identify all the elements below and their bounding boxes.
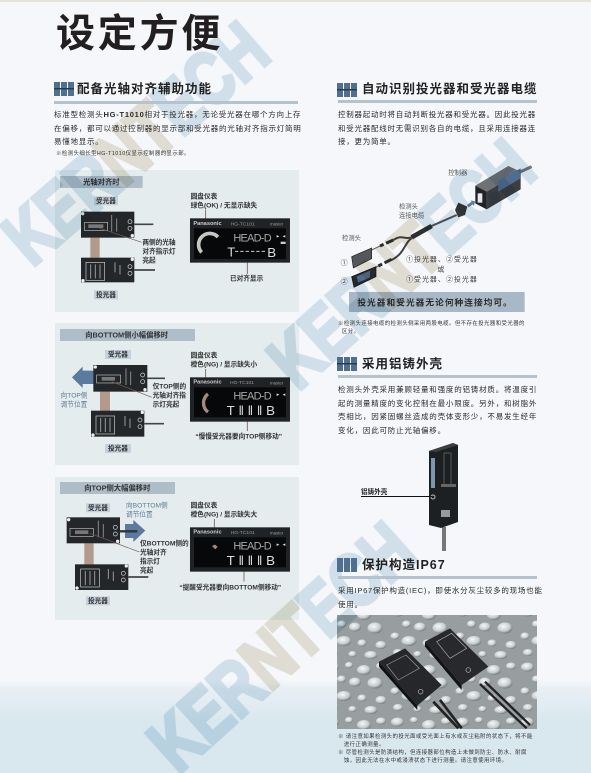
heading: auto identify cables: 自动识别投光器和受光器电缆: [362, 82, 538, 96]
label: emitter: [94, 290, 118, 299]
arrow: adjust to top: [72, 367, 94, 388]
label: sensor head: 检测头: [342, 233, 361, 242]
controller display: Panasonic: [193, 221, 222, 227]
notes: IP67: 蚀，因此无法在水中或浸渍状态下进行测量。请注意使用环境。: [344, 758, 507, 764]
controller unit: [475, 166, 532, 209]
text: auto identify body: [338, 110, 536, 146]
controller display: HEAD-D: [233, 232, 272, 244]
controller display: T: [227, 245, 235, 259]
panel: large offset background: [55, 477, 299, 620]
panel 2 diagram: small offset to bottom: [60, 329, 290, 453]
optical beam: [90, 238, 100, 258]
optical beam: [84, 543, 94, 564]
note: cable: [338, 320, 525, 335]
leader line: [206, 209, 247, 274]
label: receiver: 受光器: [108, 350, 128, 359]
callout: move hint: “提醒受光器要向BOTTOM侧移动”: [179, 582, 281, 591]
controller display: [190, 527, 290, 572]
label: adjust direction: 调节位置: [126, 509, 153, 518]
photo: waterproof sensors: [337, 615, 537, 729]
callout bar: [349, 292, 525, 312]
sensor head 2: [352, 267, 376, 287]
text: aluminum housing body: 变化，因此可防止光轴偏移。: [338, 426, 446, 434]
label: receiver: [86, 503, 110, 512]
callout: both indicators lit: 两侧的光轴: [142, 237, 176, 246]
note: cable: ※检测头连接电缆的检测头侧采用两股电缆。但不存在投光器和受光器的: [338, 321, 525, 327]
leader line: [90, 533, 139, 552]
text: IP67 body: [338, 586, 543, 608]
label: adjust direction: 向TOP侧: [61, 390, 88, 399]
panel title: [60, 482, 175, 494]
note: cable: 区分。: [342, 329, 359, 335]
panel title: [60, 329, 195, 341]
label: sensor cable: [399, 202, 425, 220]
arrow: plug to controller: [467, 200, 475, 207]
label: emitter: 投光器: [96, 290, 116, 299]
sensor: emitter: [81, 258, 155, 282]
controller display: Panasonic: [193, 380, 222, 386]
connection options: ①投光器、②受光器: [406, 255, 478, 264]
panel 3 diagram: large offset to top: [60, 482, 290, 605]
controller display: HEAD-D: [233, 540, 272, 552]
label: aluminum housing: 铝铸外壳: [361, 487, 388, 496]
callout: top indicator lit: 示灯亮起: [153, 400, 180, 409]
callout: circle meter: 圆盘仪表: [191, 191, 218, 200]
controller display: [190, 218, 290, 263]
panel title: 光轴对齐时: [83, 178, 120, 187]
connector cable: [370, 203, 467, 271]
top strip: [0, 0, 591, 2]
label: receiver: 受光器: [96, 196, 116, 205]
label: receiver: 受光器: [88, 503, 108, 512]
controller display: T‖‖‖B: [227, 553, 275, 568]
label: adjust direction: [61, 390, 88, 408]
leader line: [112, 382, 152, 397]
sensor head 1: [352, 248, 372, 268]
callout: circle meter: [191, 191, 258, 209]
number 2: ②: [341, 277, 348, 285]
callout: move hint: “慢慢受光器要向TOP侧移动”: [195, 431, 282, 440]
sensor: emitter: [91, 411, 164, 437]
text: alignment assist body: [54, 110, 302, 146]
text: auto identify body: 接，更为简单。: [338, 137, 396, 146]
callout bar: 投光器和受光器无论何种连接均可。: [357, 297, 513, 308]
connection diagram: [341, 166, 532, 312]
callout: both indicators lit: 亮起: [142, 255, 156, 264]
heading: aluminum housing: 采用铝铸外壳: [362, 357, 443, 371]
section bullet icon 2: [337, 83, 357, 97]
panel title: 向TOP侧大幅偏移时: [84, 484, 151, 493]
callout: circle meter: 圆盘仪表: [191, 351, 218, 360]
text: aluminum housing body: 检测头外壳采用兼顾轻量和强度的铝铸材质。将温度引: [338, 385, 537, 394]
title: 设定方便: [56, 13, 223, 56]
controller display: B: [267, 245, 276, 260]
connection options: [406, 255, 478, 284]
sensor: emitter: [75, 564, 148, 590]
callout: top indicator lit: 光轴对齐指: [153, 391, 186, 400]
text: aluminum housing body: 壳相比，因紧固螺丝造成的壳体变形少，不易发生经年: [338, 412, 537, 421]
label: sensor cable: 检测头: [399, 202, 418, 211]
panel: small offset background: [55, 323, 299, 465]
watermark middle right: KERNTECH: [252, 124, 551, 405]
callout: bottom indicator lit: 亮起: [140, 565, 154, 574]
label: adjust direction: 调节位置: [61, 399, 88, 408]
notes: IP67: [338, 733, 533, 764]
label: controller: 控制器: [448, 168, 468, 177]
text: alignment assist body: 在偏移，都可以通过控制器的显示部和受光器的光轴对齐指示灯简明: [54, 124, 302, 132]
bottom water texture band: [0, 680, 591, 773]
callout: bottom indicator lit: 光轴对齐: [140, 547, 167, 556]
heading: IP67: 保护构造IP67: [362, 558, 446, 572]
label: emitter: [86, 596, 110, 605]
label: emitter: [105, 444, 131, 453]
callout: top indicator lit: [153, 382, 187, 409]
callout: bottom indicator lit: 指示灯: [140, 556, 160, 565]
label: receiver: [94, 196, 118, 205]
callout: both indicators lit: 对齐指示灯: [142, 246, 176, 255]
label: sensor cable: 连接电缆: [399, 211, 425, 220]
callout: both indicators lit: [142, 237, 176, 264]
text: aluminum housing body: [338, 385, 537, 434]
label: adjust direction: 向BOTTOM侧: [126, 500, 168, 509]
callout: aligned display: 已对齐显示: [230, 274, 264, 283]
arrow: adjust to bottom: [125, 520, 145, 542]
callout: bottom indicator lit: [140, 538, 189, 574]
leader line: [214, 519, 244, 582]
controller display: HG-TC101: [231, 530, 255, 536]
text: auto identify body: 控制器起动时将自动判断投光器和受光器。因此投光器: [338, 110, 536, 119]
connection options: ①受光器、②投光器: [406, 275, 478, 284]
optical beam: [100, 392, 110, 411]
aluminum housing sensor: [429, 443, 458, 551]
text: alignment assist body: 标准型检测头HG-T1010相对于投光器，无论受光器在哪个方向上存: [54, 110, 301, 119]
controller display: master: [270, 380, 284, 385]
text: IP67 body: 使用。: [338, 600, 363, 608]
label: adjust direction: [126, 500, 168, 518]
callout: circle meter: 橙色(NG) / 显示缺失小: [191, 360, 258, 369]
panel title: [60, 176, 143, 188]
callout: bottom indicator lit: 仅BOTTOM侧的: [140, 538, 189, 547]
callout: circle meter: 圆盘仪表: [191, 501, 218, 510]
label: receiver: [105, 350, 131, 359]
number 1: ①: [341, 259, 348, 267]
callout: circle meter: [191, 501, 258, 519]
text: IP67 body: 采用IP67保护构造(IEC)，即使水分灰尘较多的现场也能: [338, 586, 543, 595]
controller display: HEAD-D: [233, 390, 272, 402]
section bullet icon 1: [54, 82, 74, 96]
controller display: [190, 377, 290, 422]
controller display: HG-TC101: [231, 221, 255, 227]
controller display: master: [270, 530, 284, 535]
controller display: Panasonic: [193, 530, 222, 536]
callout: circle meter: 橙色(NG) / 显示缺失大: [191, 510, 258, 519]
callout: circle meter: 绿色(OK) / 无显示缺失: [191, 200, 258, 209]
leader line: [100, 228, 142, 242]
notes: IP67: 进行正确测量。: [344, 742, 385, 748]
controller display: T‖‖‖B: [227, 403, 275, 418]
controller display: master: [270, 222, 284, 227]
notes: IP67: ※ 尽管检测头是防濆结构，但连接器部位构造上未做到防尘、防水、耐腐: [338, 750, 527, 756]
sensor: receiver: [93, 365, 165, 392]
note: alignment assist: ※检测头细长型HG-T1010仅显示控制器的显示部。: [56, 151, 190, 157]
sensor: receiver: [81, 212, 153, 238]
panel: aligned background: [55, 170, 299, 312]
heading: alignment assist: 配备光轴对齐辅助功能: [77, 82, 212, 96]
sensor: receiver: [67, 517, 137, 543]
leader line: [206, 369, 247, 431]
text: auto identify body: 和受光器配线时无需识别各自的电缆，且采用连接器连: [338, 124, 536, 132]
callout: circle meter: [191, 351, 258, 369]
label: emitter: 投光器: [88, 596, 108, 605]
section bullet icon 4: [337, 558, 357, 572]
label: aluminum housing: [361, 487, 432, 497]
text: alignment assist body: 易懂地显示。: [54, 137, 104, 146]
controller display: HG-TC101: [230, 380, 254, 386]
notes: IP67: ※ 请注意如果检测头的投光面或受光面上有水或灰尘粘附的状态下，将不能: [338, 734, 533, 740]
label: emitter: 投光器: [108, 444, 128, 453]
panel 1 diagram: optical axis aligned: [60, 176, 290, 299]
section bullet icon 3: [337, 357, 357, 371]
panel title: 向BOTTOM侧小幅偏移时: [85, 331, 169, 340]
connection options: 或: [437, 265, 445, 274]
text: aluminum housing body: 起的测量精度的变化控制在最小限度。另外，和树脂外: [338, 398, 537, 408]
callout: top indicator lit: 仅TOP侧的: [153, 382, 187, 391]
